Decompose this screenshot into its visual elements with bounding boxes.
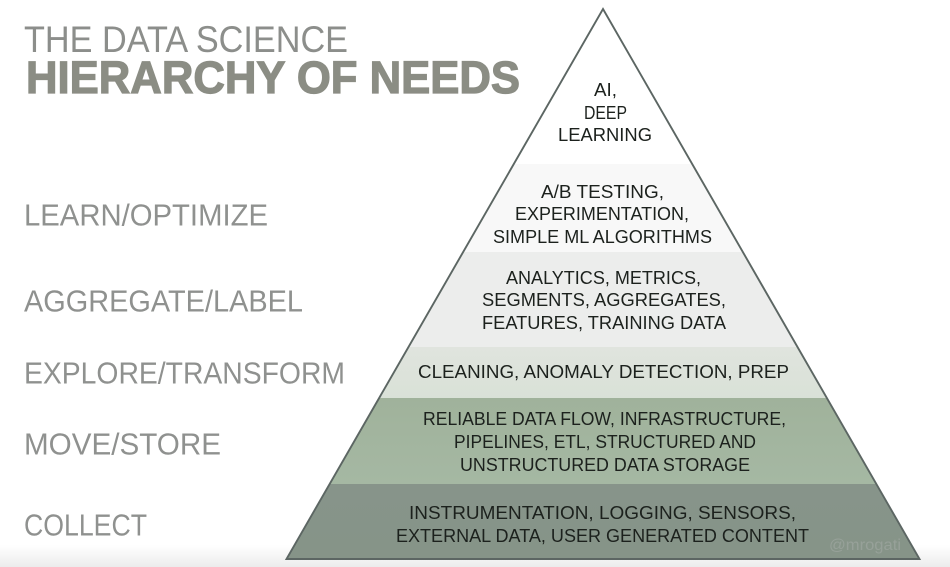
tier: analytics: FEATURES, TRAINING DATA xyxy=(482,312,727,333)
title line: hierarchy of needs: HIERARCHY OF NEEDS xyxy=(26,52,520,103)
tier: data flow and storage: RELIABLE DATA FLOW, INFRASTRUCTURE, xyxy=(423,408,786,429)
tier: testing and simple ML xyxy=(463,164,743,252)
tier: cleaning: CLEANING, ANOMALY DETECTION, PREP xyxy=(418,361,789,382)
tier: data flow and storage: UNSTRUCTURED DATA STORAGE xyxy=(460,454,750,475)
tier: analytics: SEGMENTS, AGGREGATES, xyxy=(482,289,726,310)
tier: analytics: ANALYTICS, METRICS, xyxy=(506,267,701,288)
label: explore/transform: EXPLORE/TRANSFORM xyxy=(24,356,345,390)
pyramid outline xyxy=(286,9,920,559)
tier: AI, deep learning: LEARNING xyxy=(558,124,652,145)
tier: analytics xyxy=(408,252,798,347)
title xyxy=(24,19,520,103)
tier: data flow and storage xyxy=(330,398,876,484)
tier: cleaning xyxy=(379,347,827,398)
tier: instrumentation and collection xyxy=(286,484,920,559)
tier: AI, deep learning: AI, xyxy=(594,79,617,100)
label: move/store: MOVE/STORE xyxy=(24,428,221,462)
tier: data flow and storage: PIPELINES, ETL, STRUCTURED AND xyxy=(454,431,756,452)
label: learn/optimize: LEARN/OPTIMIZE xyxy=(24,199,268,233)
label: collect: COLLECT xyxy=(24,508,147,542)
tier: instrumentation and collection: INSTRUMENTATION, LOGGING, SENSORS, xyxy=(409,502,796,523)
tier: testing and simple ML: SIMPLE ML ALGORITHMS xyxy=(493,226,712,247)
tier: instrumentation and collection: EXTERNAL DATA, USER GENERATED CONTENT xyxy=(396,525,809,546)
watermark: @mrogati: @mrogati xyxy=(829,537,901,554)
pyramid xyxy=(286,9,920,559)
tier: testing and simple ML: EXPERIMENTATION, xyxy=(515,203,689,224)
title line: the data science: THE DATA SCIENCE xyxy=(24,19,348,60)
tier: AI, deep learning: DEEP xyxy=(584,102,627,123)
label: aggregate/label: AGGREGATE/LABEL xyxy=(24,284,303,318)
tier: testing and simple ML: A/B TESTING, xyxy=(541,181,664,202)
stage labels xyxy=(24,199,345,542)
tier: AI, deep learning xyxy=(514,9,692,164)
